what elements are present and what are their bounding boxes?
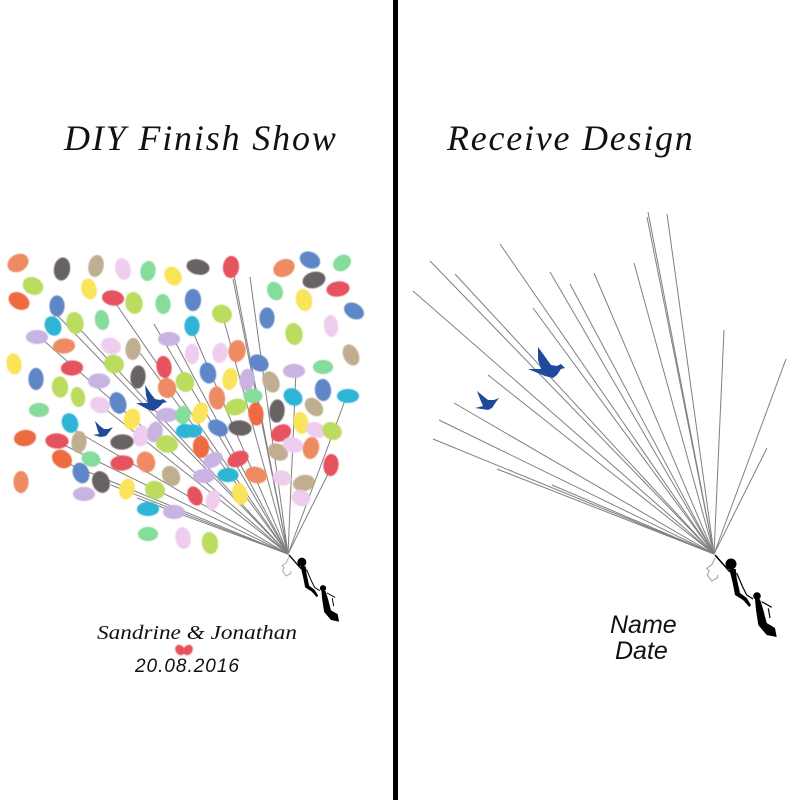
panel: finished balloon tree strings	[43, 275, 347, 554]
icon: small bird, right panel	[475, 391, 499, 410]
center divider	[393, 0, 398, 800]
icon: small bird, left panel	[93, 421, 113, 437]
icon: large bird, right panel	[528, 347, 565, 378]
text: wedding date: 20.08.2016	[134, 656, 239, 677]
title: Receive Design: Receive Design	[446, 118, 695, 158]
text: couple names: Sandrine & Jonathan	[97, 622, 297, 644]
icon: fingerprint heart	[173, 643, 195, 657]
icon: large bird, left panel	[136, 385, 167, 411]
text: date placeholder: Date	[615, 637, 668, 665]
figures: couple holding strings, left panel	[282, 555, 339, 622]
panel: blank design strings	[413, 212, 786, 554]
figures: couple holding strings, right panel	[707, 555, 777, 637]
title: DIY Finish Show: DIY Finish Show	[63, 118, 338, 158]
panel: colored fingerprints	[6, 250, 365, 554]
text: name placeholder: Name	[610, 611, 677, 639]
